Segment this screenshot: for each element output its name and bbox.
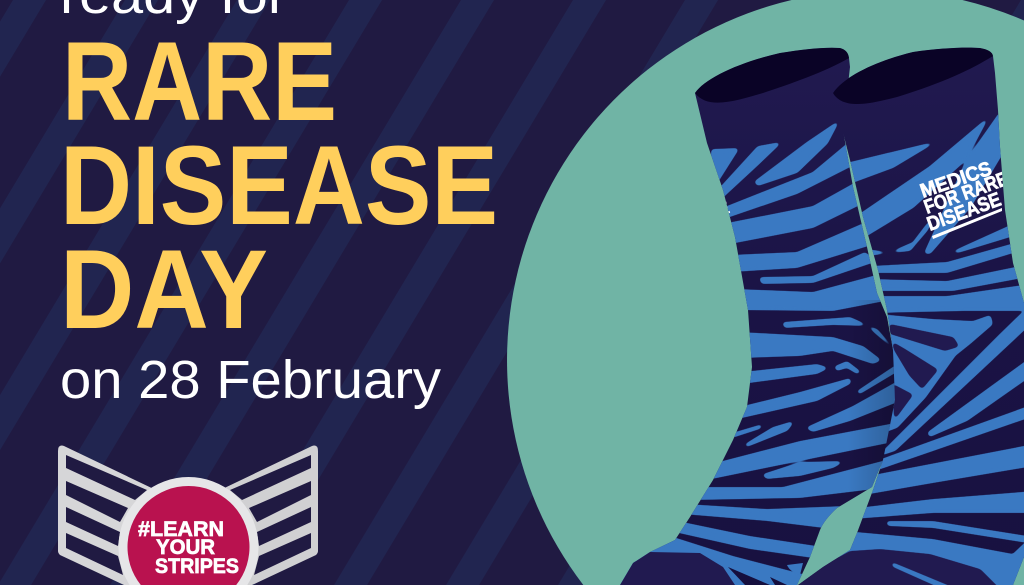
title line: RARE: RARE — [62, 19, 337, 144]
date line: on 28 February — [60, 350, 441, 410]
right chevron wing — [216, 446, 318, 585]
left toe — [620, 552, 735, 585]
badge: learn your stripes — [58, 446, 318, 585]
badge text: STRIPES — [155, 555, 239, 578]
sock logo: Medics for Rare Disease — [919, 162, 1004, 239]
badge text — [138, 518, 239, 578]
badge circle — [119, 477, 259, 585]
left sock opening — [695, 48, 849, 103]
badge text: YOUR — [156, 536, 215, 559]
sock logo: Medics for Rare Disease: FOR RARE — [921, 168, 1011, 219]
sock logo: Medics for Rare Disease: MEDICS — [917, 158, 995, 203]
badge text: #LEARN — [138, 518, 224, 541]
left chevron wing — [58, 446, 160, 585]
teal circle — [507, 0, 1024, 585]
title: Rare Disease Day — [60, 19, 498, 352]
left sock logo fragment: E — [715, 198, 732, 220]
pair of striped socks — [600, 40, 1024, 585]
sock logo: Medics for Rare Disease: DISEASE — [924, 189, 1004, 236]
right sock — [790, 40, 1024, 585]
left sock — [620, 48, 895, 585]
right sock opening — [833, 48, 993, 104]
title line: DAY: DAY — [60, 227, 268, 352]
left sock shading — [858, 300, 895, 490]
title line: DISEASE: DISEASE — [60, 123, 498, 248]
